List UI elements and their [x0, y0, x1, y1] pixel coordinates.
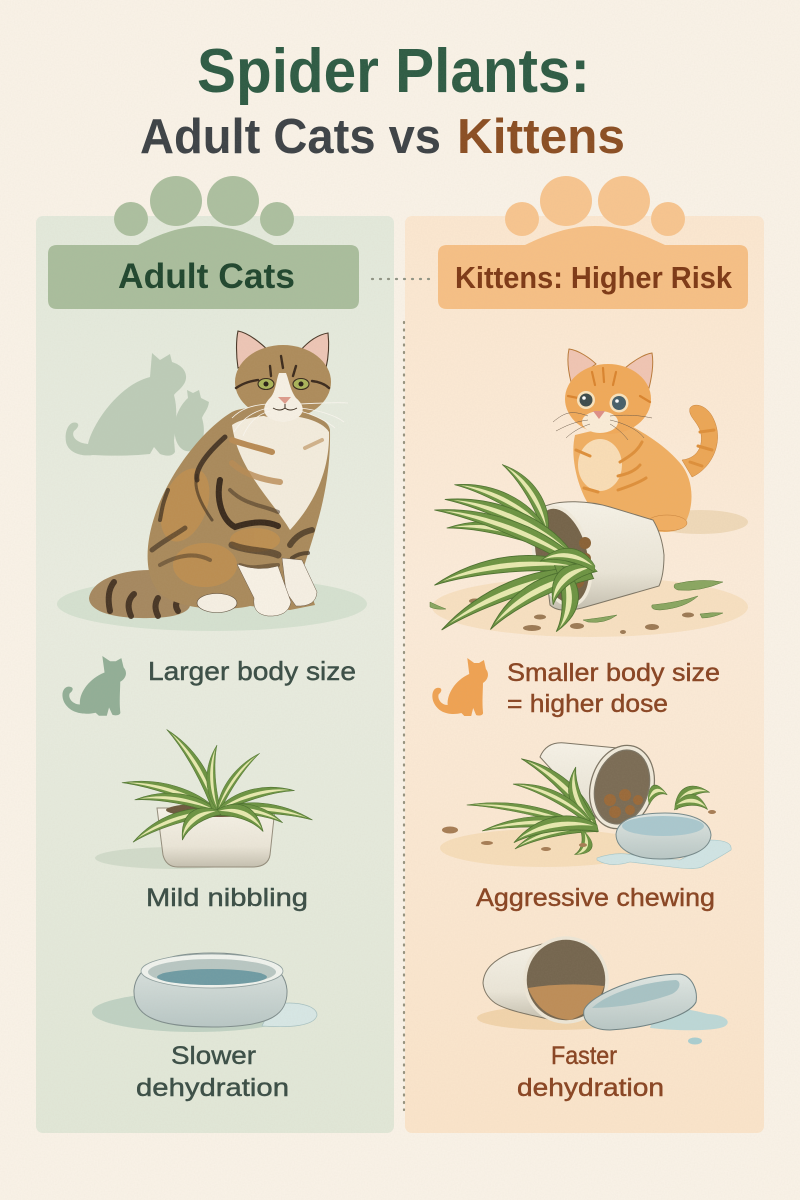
title: Spider Plants: — [197, 37, 590, 106]
shadow — [92, 992, 298, 1032]
pot body — [540, 743, 652, 826]
header: kittens paw banner — [438, 176, 748, 309]
nose and mouth — [273, 397, 297, 410]
white chest — [232, 415, 329, 530]
soil — [166, 803, 266, 817]
dried soil — [528, 984, 604, 1020]
illustration: tipped pot and water bowl — [440, 741, 731, 869]
title — [140, 37, 625, 164]
label: faster dehydration — [517, 1042, 664, 1102]
header: adult cats paw banner — [48, 176, 359, 309]
front leg left — [237, 564, 291, 616]
body — [148, 407, 330, 610]
icon: kitten silhouette — [432, 658, 488, 716]
fallen leaf pieces — [430, 580, 723, 622]
pot opening — [525, 938, 607, 1022]
icon: adult paw toes — [114, 176, 294, 236]
spilled leaves — [432, 456, 597, 637]
kitten whiskers — [553, 413, 652, 440]
kitten right ear — [625, 353, 653, 388]
panel: kittens — [405, 216, 764, 1133]
pot body — [483, 939, 576, 1020]
illustration: orange kitten with tipped plant — [430, 349, 748, 637]
title: Kittens — [457, 110, 625, 164]
label: smaller body size: = higher dose — [507, 690, 668, 718]
soil clumps — [565, 537, 591, 595]
text: larger body size row — [62, 656, 356, 716]
icon: adult cat silhouette — [62, 656, 126, 716]
kitten back paw — [647, 515, 687, 531]
ground shadow — [57, 577, 367, 631]
banner: adult cats — [48, 226, 359, 309]
kitten forehead stripes — [568, 368, 650, 402]
water spill — [262, 1003, 317, 1027]
bowl inside — [148, 959, 276, 985]
orange fur patches — [151, 462, 280, 587]
water spill — [597, 840, 731, 869]
pot body — [540, 502, 664, 610]
bowl — [616, 813, 711, 859]
bowl inside — [592, 980, 679, 1008]
label: slower dehydration: dehydration — [136, 1074, 289, 1102]
eyes — [258, 378, 309, 390]
body stripes — [152, 437, 312, 567]
left ear — [236, 331, 272, 368]
soil crumbs — [469, 598, 694, 634]
title: Adult Cats vs — [140, 110, 441, 164]
floor wash — [440, 829, 650, 867]
label: faster dehydration: Faster — [551, 1042, 617, 1070]
label: larger body size: Larger body size — [148, 656, 356, 686]
tail stripes — [109, 582, 178, 616]
pot rim — [583, 741, 661, 833]
kitten tail — [682, 405, 718, 477]
connector: dotted divider — [372, 279, 430, 1110]
forehead stripes — [236, 356, 329, 388]
leaves — [121, 723, 314, 847]
banner: kittens — [438, 226, 748, 309]
shadow — [95, 847, 255, 869]
pot opening — [583, 741, 661, 833]
tail — [89, 570, 190, 618]
whiskers — [232, 403, 348, 436]
chest fur bands — [232, 440, 322, 482]
rear paw — [197, 594, 237, 612]
kitten body — [573, 423, 692, 532]
label: faster dehydration: dehydration — [517, 1074, 664, 1102]
panel: adult cats — [36, 216, 394, 1133]
tipped bowl — [584, 974, 696, 1030]
pot — [157, 808, 275, 867]
water spill — [650, 1009, 728, 1030]
right ear — [300, 333, 329, 368]
text: smaller body size row — [432, 658, 720, 718]
soil clumps — [604, 789, 643, 818]
label: smaller body size — [507, 659, 720, 718]
label: slower dehydration: Slower — [171, 1042, 256, 1070]
bowl — [134, 953, 287, 1027]
leaves — [466, 748, 711, 860]
kitten muzzle — [582, 411, 618, 433]
heading: kittens higher risk: Kittens: Higher Risk — [455, 260, 733, 295]
head — [235, 345, 331, 419]
front leg right — [282, 558, 317, 606]
icon: cat silhouettes — [66, 353, 209, 456]
label: mild nibbling: Mild nibbling — [146, 884, 308, 912]
pot opening — [524, 501, 600, 611]
label: smaller body size: Smaller body size — [507, 659, 720, 687]
kitten head — [565, 364, 651, 434]
drip — [688, 1038, 702, 1044]
floor debris wash — [432, 577, 748, 637]
kitten left ear — [568, 349, 596, 382]
bowl rim — [141, 954, 283, 988]
label: aggressive chewing: Aggressive chewing — [476, 884, 715, 912]
illustration: adult tabby cat — [57, 331, 367, 631]
illustration: full water bowl — [92, 953, 317, 1032]
water — [622, 816, 704, 836]
heading: adult cats: Adult Cats — [118, 257, 295, 296]
illustration: empty pot and tipped bowl — [477, 938, 728, 1044]
kitten stripes — [576, 430, 714, 492]
icon: kitten paw toes — [505, 176, 685, 236]
kitten shadow — [652, 510, 748, 534]
face blaze — [264, 373, 303, 422]
soil crumbs — [442, 810, 716, 851]
label: slower dehydration — [136, 1042, 289, 1102]
kitten eyes — [577, 391, 628, 412]
kitten chest — [578, 439, 622, 491]
illustration: healthy spider plant — [95, 723, 314, 869]
water — [157, 969, 267, 985]
floor wash — [477, 1006, 633, 1030]
kitten nose — [593, 411, 605, 419]
